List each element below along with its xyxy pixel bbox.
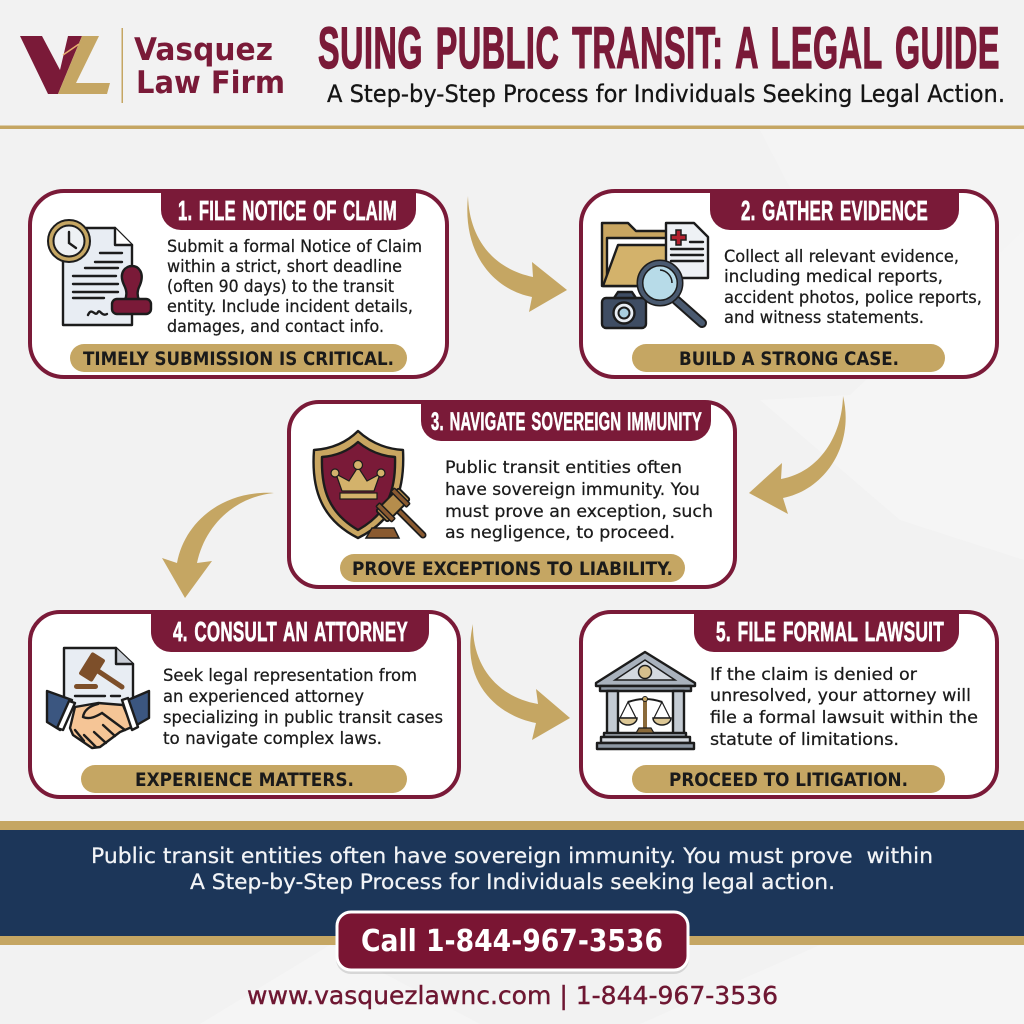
logo wordmark: Law Firm: [136, 65, 285, 101]
step 4 text: specializing in public transit cases: [163, 708, 443, 727]
panel: step 2 gather evidence: [581, 190, 997, 377]
step 4 heading: 4. CONSULT AN ATTORNEY: [173, 616, 408, 647]
step 5 takeaway: [632, 765, 945, 793]
call button: Call 1-844-967-3536: [361, 924, 663, 959]
step 1 heading: [161, 190, 416, 230]
panel: step 1 file notice of claim: [30, 190, 447, 377]
step 3 text: [445, 458, 713, 542]
step 4 text: [163, 666, 443, 748]
footer banner: [0, 821, 1024, 945]
icon: courthouse with scales: [596, 652, 695, 749]
step 2 heading: [710, 190, 959, 230]
step 4 takeaway: EXPERIENCE MATTERS.: [135, 770, 354, 791]
panel: step 4 consult an attorney: [30, 611, 459, 797]
step 3 text: must prove an exception, such: [445, 502, 713, 521]
arrow: step 2 to step 3: [749, 396, 846, 514]
step 2 takeaway: BUILD A STRONG CASE.: [679, 349, 899, 370]
arrow: step 4 to step 5: [470, 624, 570, 740]
step 3 takeaway: [340, 554, 685, 582]
panel: step 5 file formal lawsuit: [581, 611, 997, 797]
step 5 text: [710, 665, 978, 749]
step 3 text: as negligence, to proceed.: [445, 523, 675, 542]
step 2 text: Collect all relevant evidence,: [724, 247, 959, 266]
icon: document with clock and stamp: [48, 220, 151, 325]
step 1 text: Submit a formal Notice of Claim: [167, 237, 422, 256]
step 1 text: damages, and contact info.: [167, 317, 384, 336]
step 1 takeaway: [70, 344, 407, 372]
step 2 text: [724, 247, 982, 327]
logo mark VL: [20, 36, 110, 94]
step 3 heading: 3. NAVIGATE SOVEREIGN IMMUNITY: [431, 408, 702, 436]
step 1 text: entity. Include incident details,: [167, 297, 413, 316]
step 2 takeaway: [632, 344, 945, 372]
banner text: A Step-by-Step Process for Individuals seeking legal action.: [190, 870, 835, 895]
step 5 text: unresolved, your attorney will: [710, 686, 971, 705]
banner text: Public transit entities often have sovereign immunity. You must prove within: [91, 844, 933, 869]
step 1 takeaway: TIMELY SUBMISSION IS CRITICAL.: [83, 349, 394, 370]
step 4 takeaway: [81, 765, 407, 793]
step 5 text: If the claim is denied or: [710, 665, 917, 684]
icon: folder, medical report, camera and magnifier: [602, 223, 708, 328]
icon: shield with crown and gavel: [314, 431, 423, 538]
step 1 text: within a strict, short deadline: [167, 257, 402, 276]
logo wordmark: Vasquez: [134, 32, 273, 68]
step 3 text: have sovereign immunity. You: [445, 480, 700, 499]
logo wordmark: [134, 32, 285, 101]
step 1 text: [167, 237, 422, 336]
banner text: [91, 844, 933, 895]
step 2 text: accident photos, police reports,: [724, 288, 982, 307]
step 5 takeaway: PROCEED TO LITIGATION.: [669, 770, 908, 791]
step 3 heading: [421, 401, 711, 441]
logo: Vasquez Law Firm: [20, 28, 285, 103]
step 4 heading: [151, 611, 429, 652]
step 4 text: an experienced attorney: [163, 687, 364, 706]
step 1 heading: 1. FILE NOTICE OF CLAIM: [178, 195, 397, 226]
step 5 heading: [694, 611, 959, 652]
arrow: step 3 to step 4: [162, 493, 274, 598]
step 4 text: to navigate complex laws.: [163, 729, 382, 748]
step 1 text: (often 90 days) to the transit: [167, 277, 394, 296]
icon: gavel document and handshake: [47, 648, 149, 748]
step 5 text: file a formal lawsuit within the: [710, 708, 978, 727]
step 3 text: Public transit entities often: [445, 458, 682, 477]
step 4 text: Seek legal representation from: [163, 666, 417, 685]
panel: step 3 navigate sovereign immunity: [289, 401, 735, 587]
call button: [336, 912, 689, 974]
step 2 text: including medical reports,: [724, 267, 943, 286]
arrow: step 1 to step 2: [467, 196, 567, 312]
step 3 takeaway: PROVE EXCEPTIONS TO LIABILITY.: [352, 559, 673, 580]
step 5 text: statute of limitations.: [710, 730, 899, 749]
footer contact line: www.vasquezlawnc.com | 1-844-967-3536: [247, 981, 778, 1010]
step 2 text: and witness statements.: [724, 308, 924, 327]
